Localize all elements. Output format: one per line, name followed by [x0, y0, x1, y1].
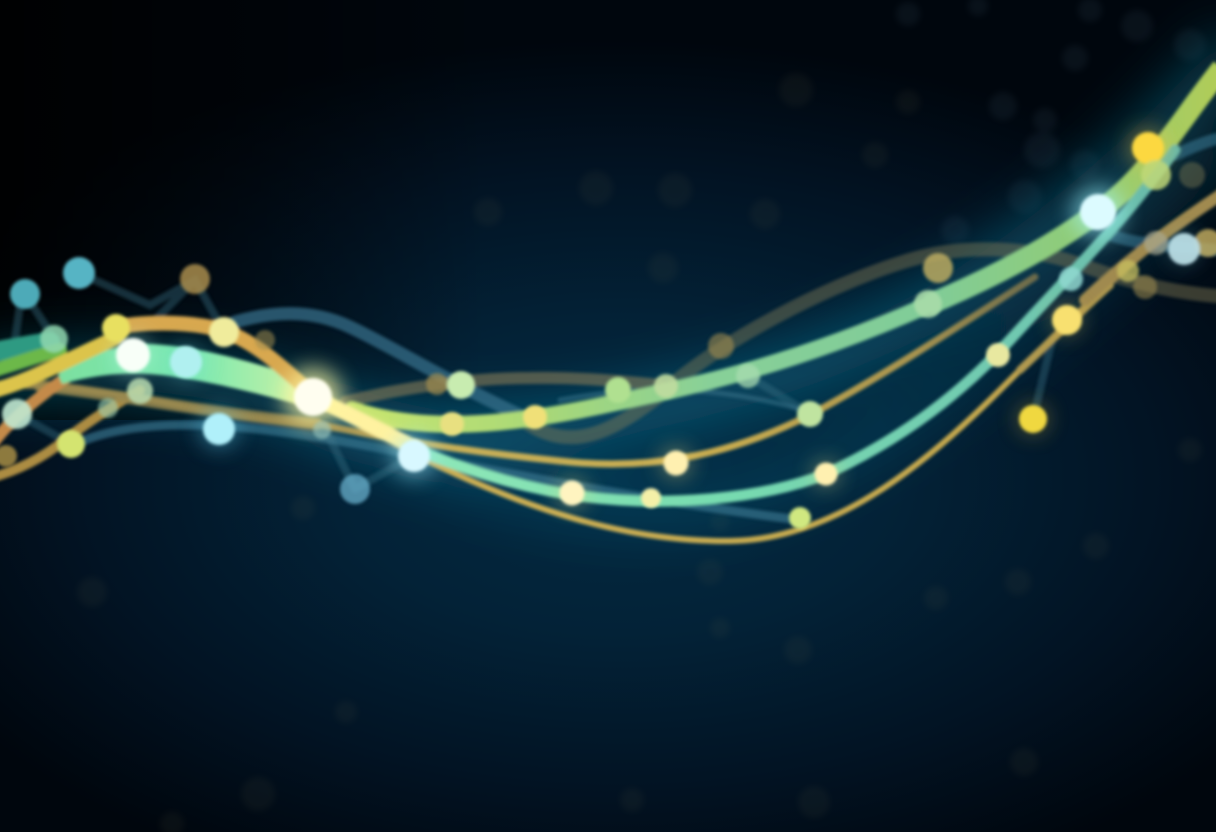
faded curves and connector lines	[0, 68, 1216, 541]
yellow left band	[0, 338, 116, 392]
main mint band left section	[58, 344, 322, 407]
gold medium curve	[0, 277, 1035, 464]
teal band	[400, 150, 1175, 501]
faded blue right strands	[1110, 139, 1216, 250]
green left band	[0, 350, 60, 372]
faded gold upper strand	[345, 378, 660, 402]
faded gold long strand	[530, 249, 1216, 437]
faded blue mid strand	[560, 390, 810, 412]
gold arc	[116, 323, 310, 392]
bright yellow crossing	[313, 397, 412, 446]
faded blue upper curve	[235, 314, 530, 420]
node halos	[113, 128, 1200, 509]
connector lines	[15, 273, 1052, 489]
main band middle section	[352, 305, 928, 424]
nodes	[0, 132, 1216, 529]
main band right section	[928, 68, 1216, 305]
background bokeh dots	[896, 0, 1206, 244]
ambient glow around the curves	[0, 60, 1216, 508]
crossing glow	[313, 397, 412, 446]
gold long curve	[370, 198, 1216, 541]
orange lower-left strand	[0, 368, 80, 442]
gold low-left strand	[0, 390, 140, 478]
dark green left band	[0, 342, 50, 353]
faded blue lower curve	[80, 425, 800, 520]
